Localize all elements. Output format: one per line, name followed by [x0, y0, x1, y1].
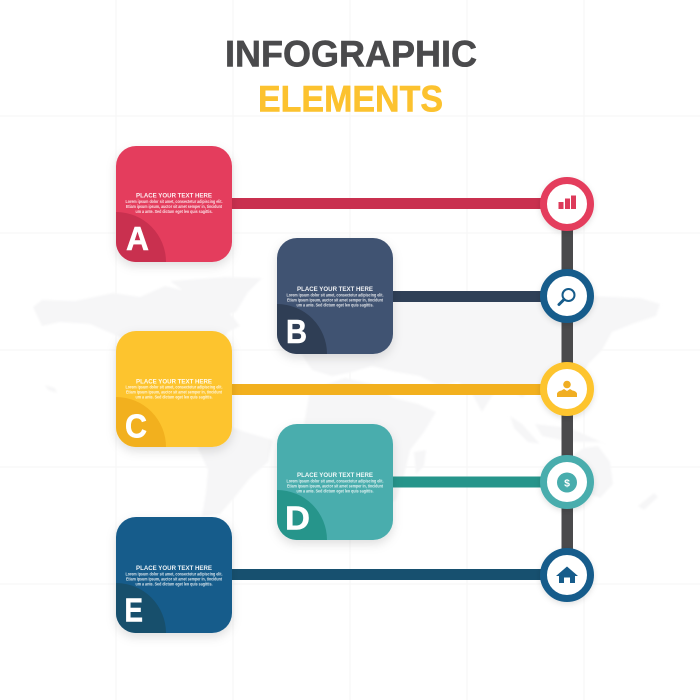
- panel: D: [274, 424, 396, 547]
- connector bar B: [393, 291, 545, 302]
- corner shape E: [116, 583, 166, 633]
- body text C: Lorem ipsum dolor sit amet, consectetur adipiscing elit.: [126, 384, 222, 390]
- body text C: [126, 384, 223, 400]
- icon: bar chart: [558, 196, 576, 209]
- body text B: um a ante. Sed dictum eget leo quis sagittis.: [296, 302, 374, 308]
- node: search icon: [544, 272, 590, 320]
- body text A: [126, 199, 223, 214]
- letter A: A: [126, 220, 149, 257]
- corner shape C: [116, 397, 166, 447]
- connector bar D: [393, 476, 545, 488]
- body text E: Etiam ipsum ipsum, auctor sit amet semper in, tincidunt: [126, 576, 223, 582]
- heading C: PLACE YOUR TEXT HERE: [136, 378, 213, 386]
- body text A: Lorem ipsum dolor sit amet, consectetur adipiscing elit.: [126, 199, 222, 204]
- body text E: um a ante. Sed dictum eget leo quis sagittis.: [136, 582, 212, 586]
- world map background: [33, 277, 660, 516]
- body text C: Etiam ipsum ipsum, auctor sit amet semper in, tincidunt: [126, 390, 223, 394]
- body text E: [126, 572, 223, 586]
- title: INFOGRAPHIC: [225, 32, 477, 74]
- heading E: PLACE YOUR TEXT HERE: [136, 565, 213, 572]
- body text B: Etiam ipsum ipsum, auctor sit amet semper in, tincidunt: [287, 298, 384, 302]
- title: [225, 32, 477, 120]
- corner shape D: [277, 490, 327, 540]
- panel: E: [113, 517, 235, 640]
- heading B: PLACE YOUR TEXT HERE: [297, 286, 374, 293]
- heading A: PLACE YOUR TEXT HERE: [136, 192, 213, 200]
- connector bar C: [232, 384, 544, 395]
- body text E: Lorem ipsum dolor sit amet, consectetur adipiscing elit.: [126, 572, 222, 576]
- letter E: E: [124, 592, 143, 628]
- connector bar A: [232, 198, 544, 209]
- body text D: [286, 478, 384, 494]
- panel: A: [113, 146, 235, 269]
- node: home icon: [544, 552, 590, 598]
- heading D: PLACE YOUR TEXT HERE: [297, 472, 374, 479]
- icon: dollar coin: $: [564, 478, 570, 490]
- letter C: C: [125, 408, 147, 444]
- body text D: Lorem ipsum dolor sit amet, consectetur adipiscing elit.: [286, 478, 384, 484]
- icon: magnifier: [559, 289, 574, 304]
- body text C: um a ante. Sed dictum eget leo quis sagittis.: [136, 394, 212, 400]
- node: bar chart icon: [544, 180, 590, 228]
- body text B: Lorem ipsum dolor sit amet, consectetur adipiscing elit.: [286, 292, 384, 298]
- body text D: Etiam ipsum ipsum, auctor sit amet semper in, tincidunt: [287, 484, 384, 488]
- body text D: um a ante. Sed dictum eget leo quis sagittis.: [296, 488, 374, 494]
- corner shape B: [277, 304, 327, 354]
- panel: B: [274, 238, 396, 361]
- body text B: [286, 292, 384, 308]
- node: dollar icon: [544, 458, 590, 506]
- body text A: Etiam ipsum ipsum, auctor sit amet semper in, tincidunt: [126, 204, 223, 209]
- connector bar E: [232, 569, 544, 580]
- panel: C: [113, 331, 235, 454]
- letter B: B: [286, 313, 307, 350]
- node: person icon: [544, 366, 590, 412]
- corner shape A: [116, 212, 166, 262]
- vertical timeline connector: [562, 204, 573, 575]
- icon: house: [556, 566, 578, 583]
- title: ELEMENTS: [258, 78, 443, 120]
- letter D: D: [285, 500, 310, 536]
- body text A: um a ante. Sed dictum eget leo quis sagittis.: [136, 209, 212, 214]
- icon: person: [557, 381, 577, 397]
